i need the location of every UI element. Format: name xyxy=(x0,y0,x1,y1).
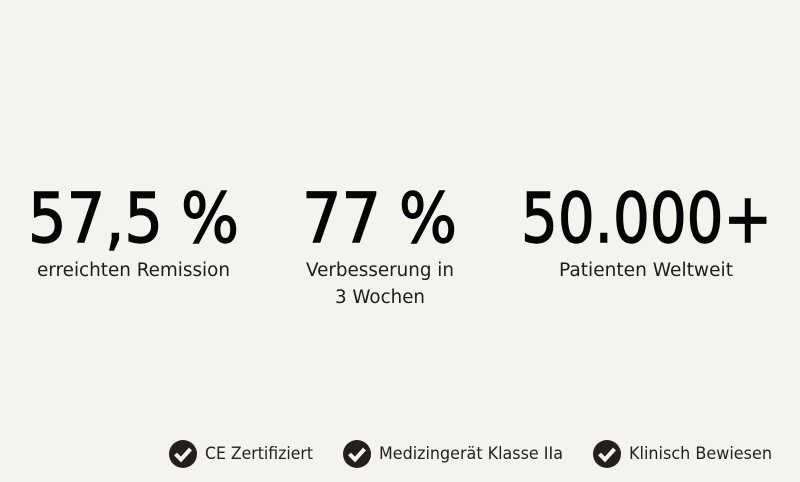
stat label: Verbesserung in 3 Wochen: Verbesserung in xyxy=(306,260,454,281)
stat: 77 % improvement xyxy=(302,179,457,308)
stat label: erreichten Remission: erreichten Remission xyxy=(37,260,230,281)
stat number: 57,5 %: % xyxy=(181,179,239,259)
stat number: 77 % xyxy=(302,179,457,259)
stat number: 77 %: 77 xyxy=(302,179,381,259)
stat: 57,5 % remission xyxy=(28,179,239,281)
badge: Medizingerät Klasse IIa xyxy=(343,440,563,468)
stat number: 57,5 %: 57,5 xyxy=(28,179,163,259)
badge: Klinisch Bewiesen xyxy=(593,440,772,468)
icon: check circle xyxy=(343,440,371,468)
stat label: Verbesserung in 3 Wochen xyxy=(306,260,454,308)
stat: 50.000+ patients xyxy=(521,179,772,281)
badge: Klinisch Bewiesen: Klinisch Bewiesen xyxy=(629,444,772,464)
stat number: 77 %: % xyxy=(399,179,457,259)
stat label: Verbesserung in 3 Wochen: 3 Wochen xyxy=(335,287,425,308)
icon: check circle xyxy=(593,440,621,468)
stat label: Patienten Weltweit: Patienten Weltweit xyxy=(559,260,733,281)
badge: Medizingerät Klasse IIa: Medizingerät Klasse IIa xyxy=(379,444,563,464)
icon: check circle xyxy=(169,440,197,468)
badge: CE Zertifiziert xyxy=(169,440,313,468)
badge: CE Zertifiziert: CE Zertifiziert xyxy=(205,444,313,464)
